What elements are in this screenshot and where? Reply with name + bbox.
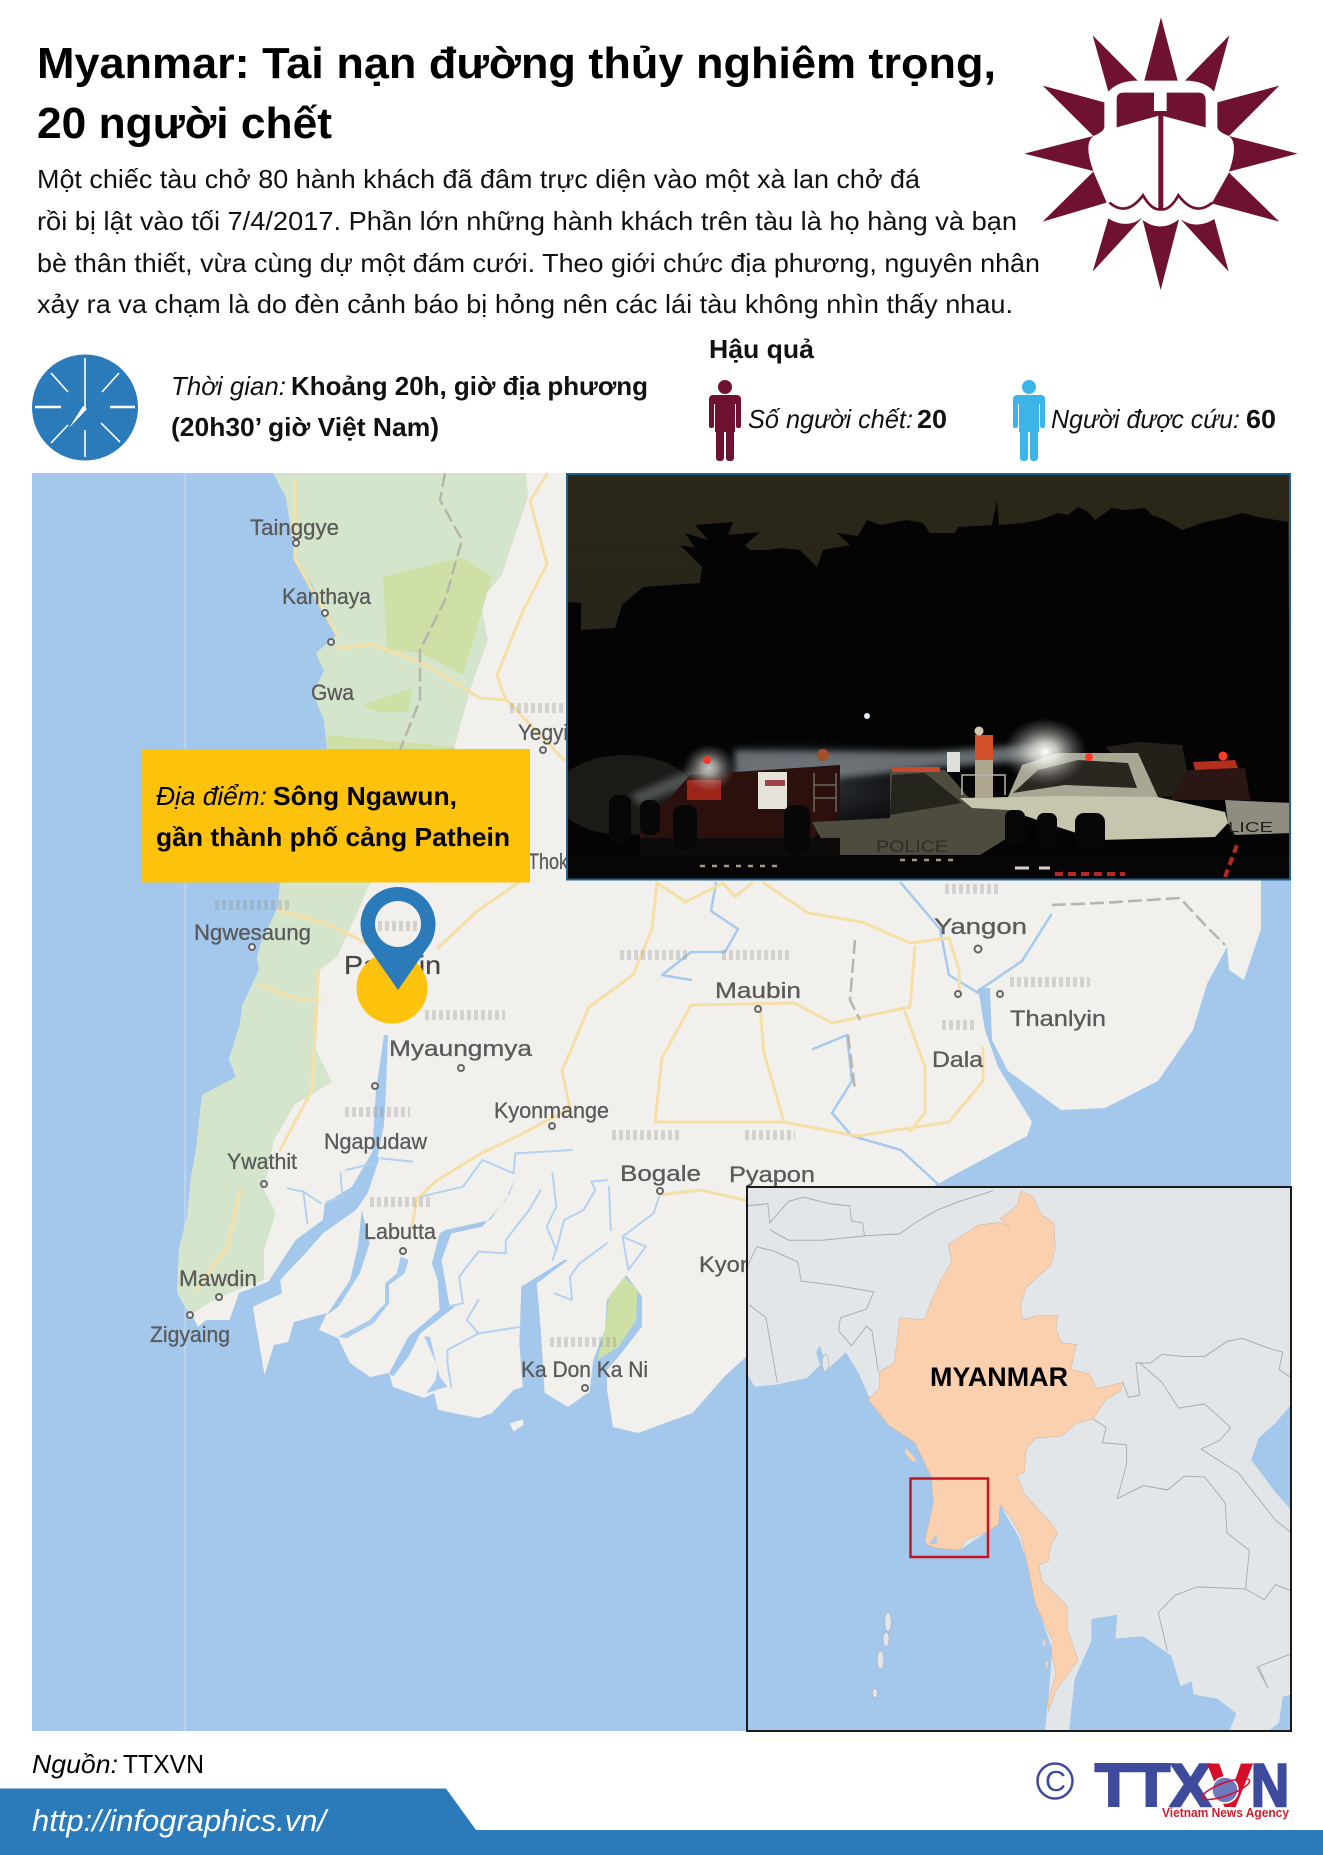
sub-element: neighbouring borders bbox=[747, 1191, 1292, 1688]
icon: person rescued bbox=[1013, 380, 1045, 461]
sub-element: roads bbox=[196, 474, 983, 1290]
map: Ayeyarwady delta bbox=[32, 473, 1291, 1731]
callout: location: Sông Ngawun, bbox=[273, 781, 457, 811]
sub-element: place labels: Gwa bbox=[311, 680, 355, 705]
intro text: rồi bị lật vào tối 7/4/2017. Phần lớn những hành khách trên tàu là họ hàng và bạn bbox=[37, 206, 1017, 236]
photo: rescue boats at night: LICE bbox=[1228, 819, 1273, 836]
sub-element: place labels: Pyapon bbox=[729, 1162, 815, 1187]
intro text: bè thân thiết, vừa cùng dự một đám cưới. Theo giới chức địa phương, nguyên nhân bbox=[37, 248, 1040, 278]
sub-element: place labels: Mawdin bbox=[179, 1266, 257, 1291]
icon: person dead bbox=[709, 380, 741, 461]
photo: rescue boats at night: POLICE bbox=[876, 837, 948, 856]
callout: location bbox=[141, 749, 530, 882]
sub-element: rivers and channels bbox=[239, 883, 1051, 1432]
sub-element: place labels: Yegyi bbox=[518, 720, 568, 745]
inset label: MYANMAR bbox=[930, 1362, 1068, 1392]
title bbox=[37, 39, 996, 148]
sub-element: place labels: Bogale bbox=[620, 1161, 701, 1186]
logo: TTXVN bbox=[1038, 1752, 1289, 1820]
sub-element: place labels bbox=[150, 515, 1106, 1382]
deaths text: 20 bbox=[917, 404, 947, 434]
title: 20 người chết bbox=[37, 99, 332, 148]
sub-element: town markers bbox=[187, 540, 1003, 1391]
consequences heading: Hậu quả bbox=[709, 334, 815, 364]
sub-element: place labels: Kyon bbox=[699, 1252, 753, 1277]
source: TTXVN bbox=[123, 1749, 204, 1779]
sub-element: place labels: Maubin bbox=[715, 978, 801, 1003]
inset map: Myanmar locator bbox=[747, 1187, 1292, 1732]
intro text bbox=[37, 164, 1040, 319]
logo: TTXVN: C bbox=[1045, 1766, 1066, 1798]
sub-element: place labels: Pathein bbox=[344, 950, 441, 980]
sub-element: place labels: Yangon bbox=[934, 914, 1027, 939]
logo: TTXVN: V bbox=[1208, 1752, 1252, 1819]
callout: location: Địa điểm: bbox=[156, 781, 267, 811]
sub-element: place labels: Zigyaing bbox=[150, 1322, 230, 1347]
icon: ship in star burst bbox=[1024, 17, 1298, 290]
rescued text: Người được cứu: bbox=[1051, 404, 1240, 434]
logo: TTXVN: N bbox=[1251, 1752, 1289, 1819]
callout: location: gần thành phố cảng Pathein bbox=[156, 822, 510, 852]
logo: TTXVN: Vietnam News Agency bbox=[1162, 1806, 1289, 1820]
location marker bbox=[356, 887, 436, 1024]
inset highlight box bbox=[910, 1478, 988, 1557]
sub-element: place labels: Thok bbox=[528, 849, 569, 874]
sub-element: place labels: Dala bbox=[932, 1047, 984, 1072]
sub-element: place labels: Kyonmange bbox=[494, 1098, 609, 1123]
deaths text: Số người chết: bbox=[748, 404, 913, 434]
intro text: xảy ra va chạm là do đèn cảnh báo bị hỏng nên các lái tàu không nhìn thấy nhau. bbox=[37, 289, 1013, 319]
sub-element: place labels: Labutta bbox=[364, 1219, 437, 1244]
sub-element: place labels: Ka Don Ka Ni bbox=[521, 1357, 648, 1382]
time text: (20h30’ giờ Việt Nam) bbox=[171, 412, 439, 442]
footer band: http://infographics.vn/ bbox=[32, 1803, 329, 1838]
sub-element: place labels: Myaungmya bbox=[389, 1036, 533, 1061]
time text bbox=[171, 371, 648, 442]
intro text: Một chiếc tàu chở 80 hành khách đã đâm trực diện vào một xà lan chở đá bbox=[37, 164, 921, 194]
sub-element: place labels: Ngwesaung bbox=[194, 920, 311, 945]
source: Nguồn: bbox=[32, 1749, 118, 1779]
title: Myanmar: Tai nạn đường thủy nghiêm trọng, bbox=[37, 39, 996, 88]
rescued text: 60 bbox=[1246, 404, 1276, 434]
source bbox=[32, 1749, 204, 1779]
sub-element: place labels: Tainggye bbox=[250, 515, 339, 540]
sub-element: place labels: Thanlyin bbox=[1010, 1006, 1106, 1031]
photo: rescue boats at night bbox=[555, 473, 1291, 880]
sub-element: place labels: Kanthaya bbox=[282, 584, 372, 609]
sub-element: Burmese label marks bbox=[215, 708, 1090, 1342]
sub-element: place labels: Ngapudaw bbox=[324, 1129, 427, 1154]
logo: TTXVN: TTX bbox=[1095, 1752, 1211, 1819]
footer band bbox=[0, 1788, 1323, 1855]
time text: Thời gian: bbox=[171, 371, 286, 401]
sub-element: place labels: Ywathit bbox=[227, 1149, 297, 1174]
icon: clock bbox=[32, 354, 138, 460]
time text: Khoảng 20h, giờ địa phương bbox=[291, 371, 648, 401]
sub-element: border dashes bbox=[400, 473, 1225, 1090]
